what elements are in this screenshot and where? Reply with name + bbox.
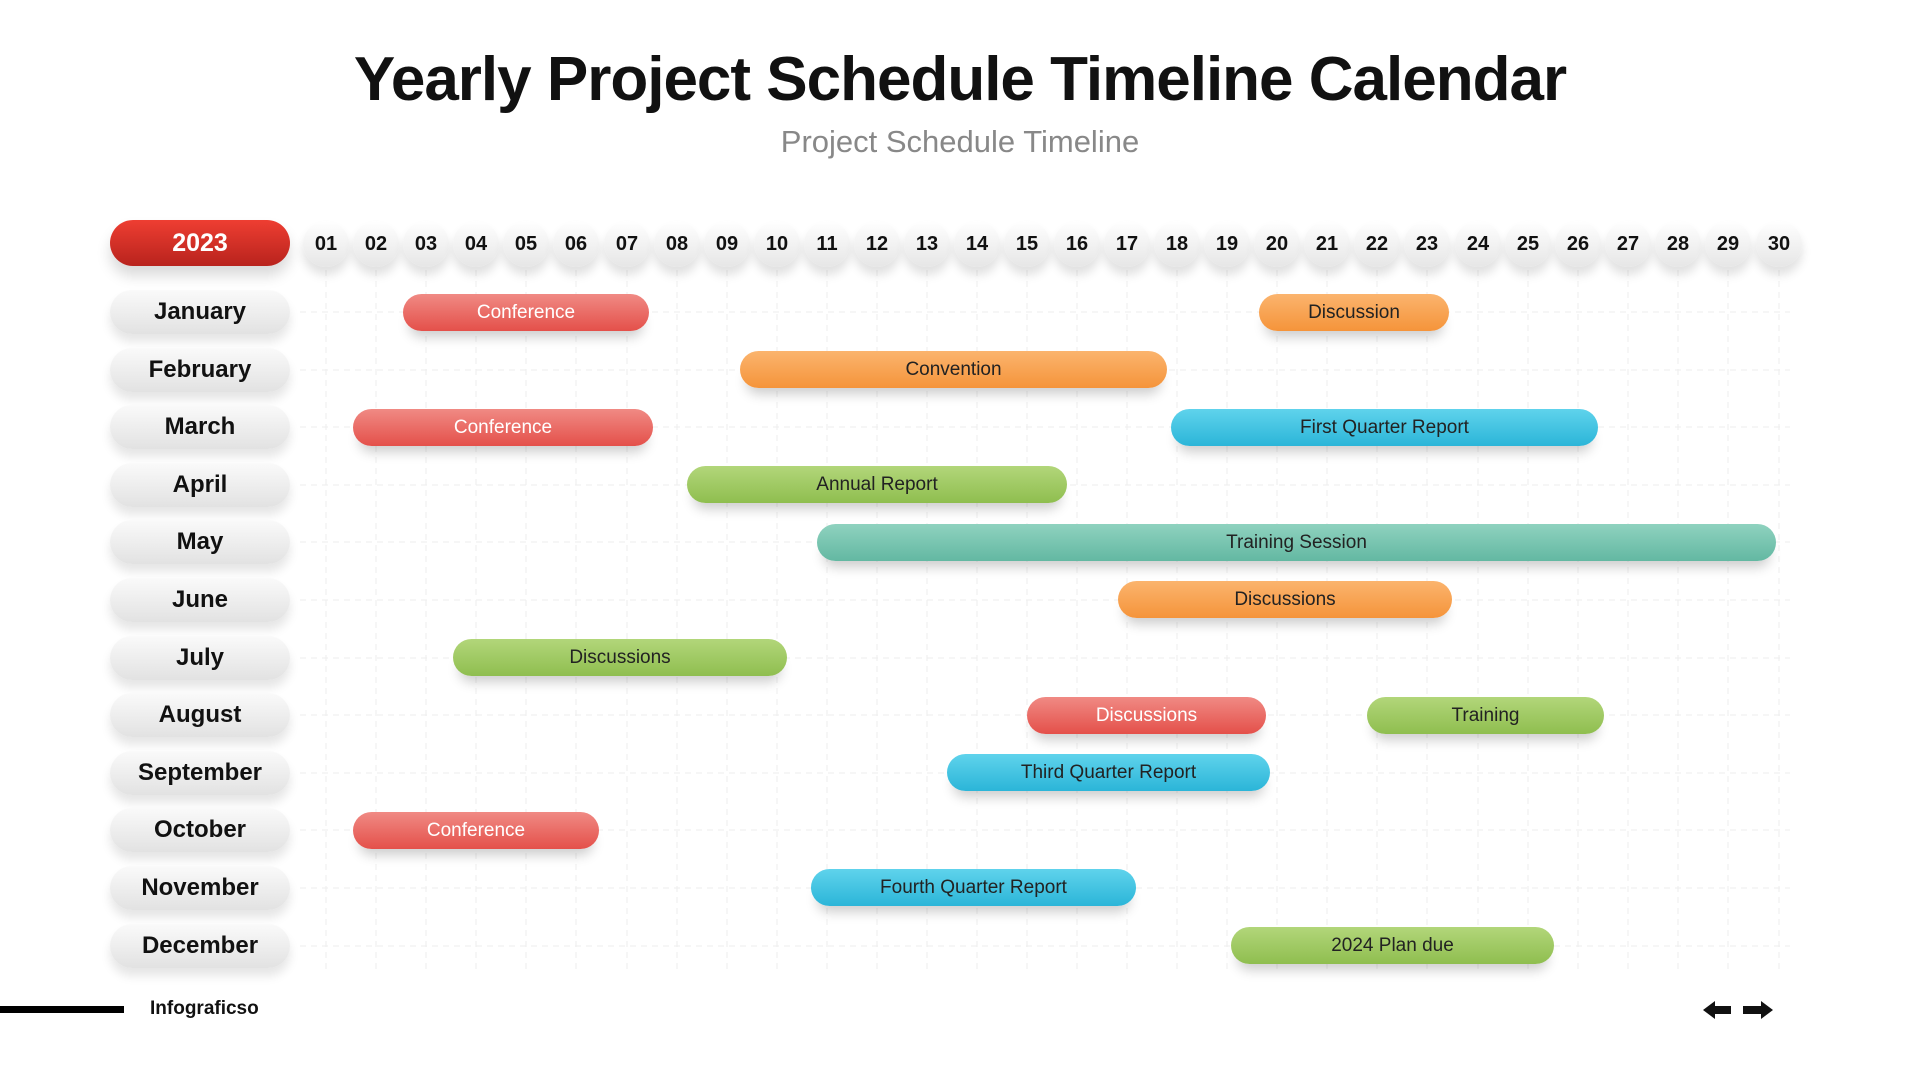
subtitle: Project Schedule Timeline	[781, 124, 1139, 159]
day header row: 02	[365, 233, 387, 255]
day header row: 01	[315, 233, 337, 255]
day header row: 22	[1366, 233, 1388, 255]
day header row: 11	[816, 233, 838, 255]
month labels: May	[177, 528, 223, 555]
day header row: 26	[1567, 233, 1589, 255]
month labels: March	[165, 413, 235, 440]
bars: schedule events: Third Quarter Report	[1021, 762, 1196, 783]
bars: schedule events: Conference	[427, 820, 525, 841]
footer line	[0, 1006, 124, 1013]
day header row: 23	[1416, 233, 1438, 255]
day header row: 27	[1617, 233, 1639, 255]
bars: schedule events: 2024 Plan due	[1331, 935, 1454, 956]
day header row: 19	[1216, 233, 1238, 255]
day header row: 05	[515, 233, 537, 255]
day header row: 30	[1768, 233, 1790, 255]
bars: schedule events: Discussion	[1308, 302, 1400, 323]
bars: schedule events: Discussions	[569, 647, 671, 668]
bars: schedule events: Training Session	[1226, 532, 1367, 553]
bars: schedule events: Discussions	[1096, 705, 1197, 726]
month labels: January	[154, 298, 246, 325]
day header row: 21	[1316, 233, 1338, 255]
month labels: November	[141, 874, 259, 901]
day header row: 15	[1016, 233, 1038, 255]
month labels: September	[138, 759, 262, 786]
day header row: 08	[666, 233, 688, 255]
day header row: 09	[716, 233, 738, 255]
bars: schedule events: Training	[1452, 705, 1519, 726]
year pill	[110, 220, 290, 266]
day header row: 25	[1517, 233, 1539, 255]
day header row: 13	[916, 233, 938, 255]
day header row: 10	[766, 233, 788, 255]
bars: schedule events: Conference	[454, 417, 552, 438]
month labels: June	[172, 586, 228, 613]
month labels: July	[176, 644, 224, 671]
day header row: 29	[1717, 233, 1739, 255]
title: Yearly Project Schedule Timeline Calendar	[354, 45, 1566, 114]
month labels: October	[154, 816, 246, 843]
month labels: December	[142, 932, 258, 959]
day header row: 07	[616, 233, 638, 255]
day header row: 14	[966, 233, 988, 255]
icon: nav arrows	[1703, 1001, 1773, 1019]
bars: schedule events: Annual Report	[816, 474, 938, 495]
month labels: April	[173, 471, 227, 498]
brand text: Infograficso	[150, 998, 259, 1019]
month labels	[108, 296, 292, 978]
day header row: 28	[1667, 233, 1689, 255]
bars: schedule events: First Quarter Report	[1300, 417, 1469, 438]
day header row: 12	[866, 233, 888, 255]
day header row: 06	[565, 233, 587, 255]
year pill: 2023	[172, 229, 228, 257]
day header row: 24	[1467, 233, 1489, 255]
day header row	[300, 233, 1804, 278]
bars: schedule events: Fourth Quarter Report	[880, 877, 1067, 898]
month labels: August	[159, 701, 241, 728]
bars: schedule events: Convention	[905, 359, 1002, 380]
day header row: 20	[1266, 233, 1288, 255]
day header row: 16	[1066, 233, 1088, 255]
day header row: 18	[1166, 233, 1188, 255]
month labels: February	[149, 356, 251, 383]
day header row: 04	[465, 233, 487, 255]
bars: schedule events: Conference	[477, 302, 575, 323]
bars: schedule events: Discussions	[1234, 589, 1336, 610]
day header row: 17	[1116, 233, 1138, 255]
day header row: 03	[415, 233, 437, 255]
